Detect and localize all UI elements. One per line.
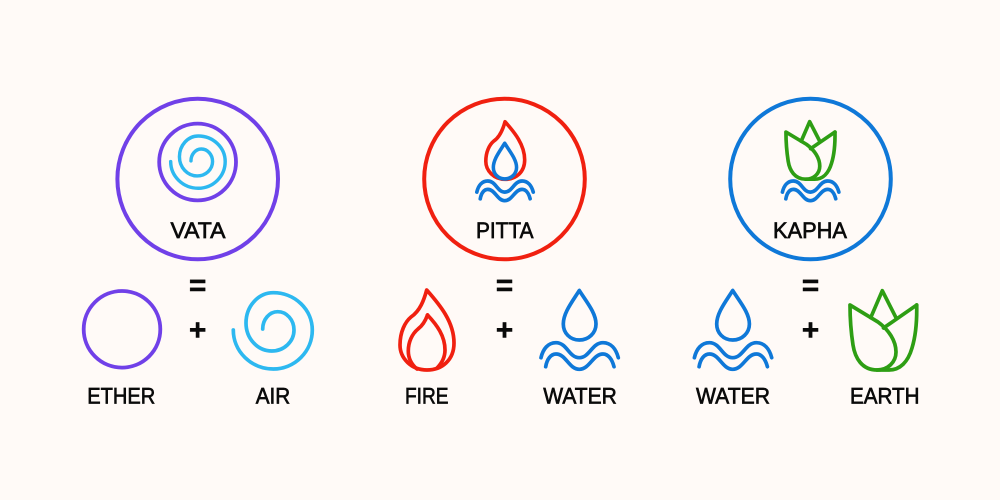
label: fire: FIRE — [405, 384, 448, 408]
icon: earth — [850, 291, 917, 370]
icon: water — [541, 290, 618, 369]
equals sign: = — [189, 269, 206, 302]
kapha outer circle — [730, 99, 891, 259]
icon: ether — [84, 291, 160, 368]
panel: kapha — [694, 99, 920, 408]
icon: fire — [400, 290, 454, 370]
heading: vata: VATA — [170, 218, 226, 243]
equals sign: = — [802, 269, 819, 302]
label: earth: EARTH — [850, 384, 920, 408]
plus sign: + — [496, 314, 513, 347]
label: ether: ETHER — [87, 384, 155, 408]
panel: vata — [84, 99, 312, 408]
icon: vata air spiral — [171, 136, 225, 188]
plus sign: + — [802, 314, 819, 347]
icon: pitta small drop — [493, 143, 517, 179]
equals sign: = — [496, 269, 513, 302]
label: air: AIR — [256, 384, 290, 408]
label: water: WATER — [696, 384, 770, 408]
icon: vata ether ring — [159, 124, 236, 200]
icon: air spiral — [233, 293, 312, 369]
vata outer circle — [117, 99, 278, 259]
icon: kapha small waves — [782, 181, 839, 201]
heading: kapha: KAPHA — [773, 218, 847, 243]
icon: kapha small leaves — [786, 122, 835, 179]
heading: pitta: PITTA — [476, 218, 534, 243]
icon: pitta small flame — [486, 122, 525, 179]
plus sign: + — [189, 314, 206, 347]
panel: pitta — [400, 99, 618, 408]
icon: water — [694, 290, 772, 369]
icon: pitta small waves — [477, 181, 533, 201]
pitta outer circle — [424, 99, 585, 259]
label: water: WATER — [543, 384, 617, 408]
